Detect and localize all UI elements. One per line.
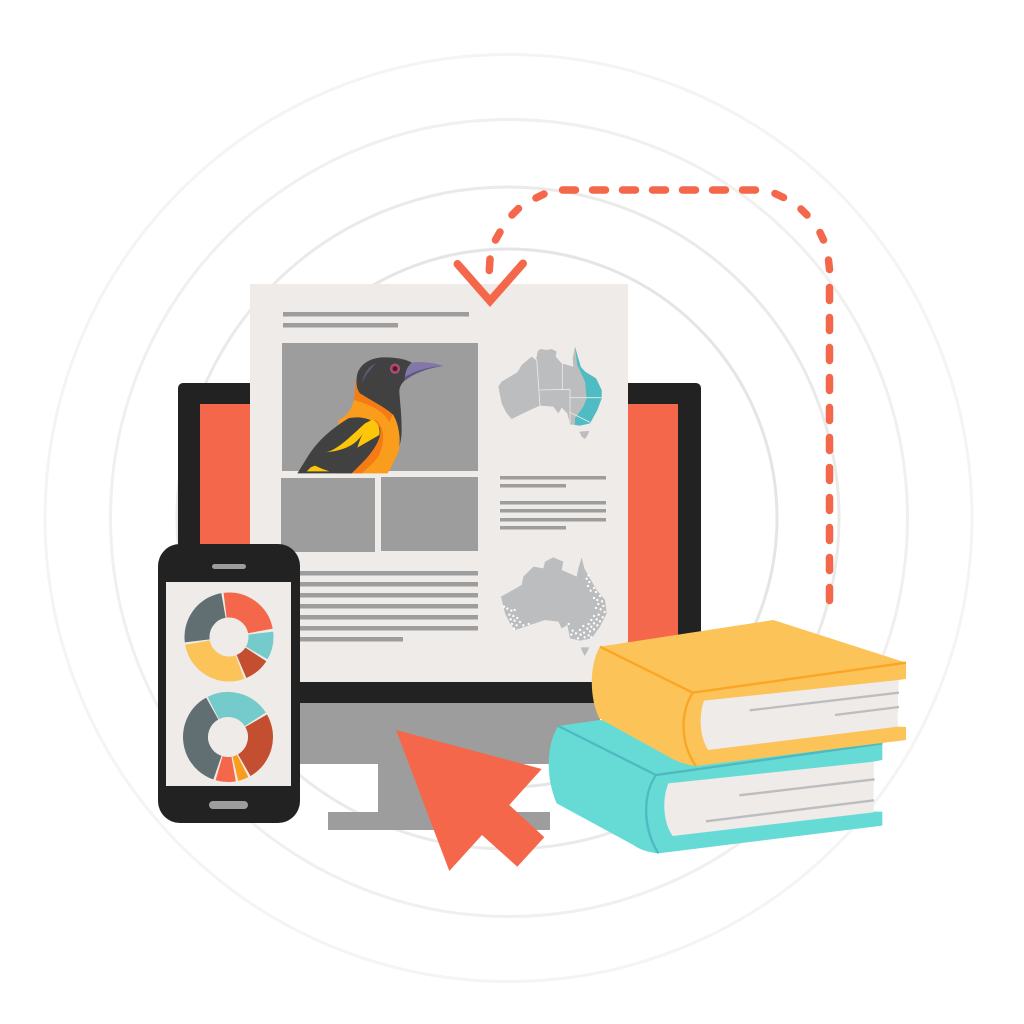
- smartphone: [158, 544, 300, 823]
- mouse cursor arrow: [396, 730, 544, 871]
- map: Australia with east coast range: [498, 347, 602, 439]
- donut chart: upper: [185, 593, 273, 681]
- donut chart: lower: [184, 693, 272, 781]
- document page: [250, 284, 628, 682]
- teal book: [549, 720, 882, 853]
- desktop monitor: [178, 383, 701, 830]
- stack of books: [549, 620, 906, 853]
- article text lines: [296, 571, 478, 642]
- map: Australia with distribution dots: [501, 557, 607, 656]
- chevron arrowhead: [458, 264, 523, 301]
- sidebar text lines: [500, 476, 606, 530]
- grey image placeholders: [281, 477, 478, 552]
- yellow book: [592, 620, 906, 766]
- photo panel: oriole bird: [282, 343, 478, 473]
- document heading lines: [283, 312, 469, 328]
- dashed return arrow path: [489, 190, 830, 600]
